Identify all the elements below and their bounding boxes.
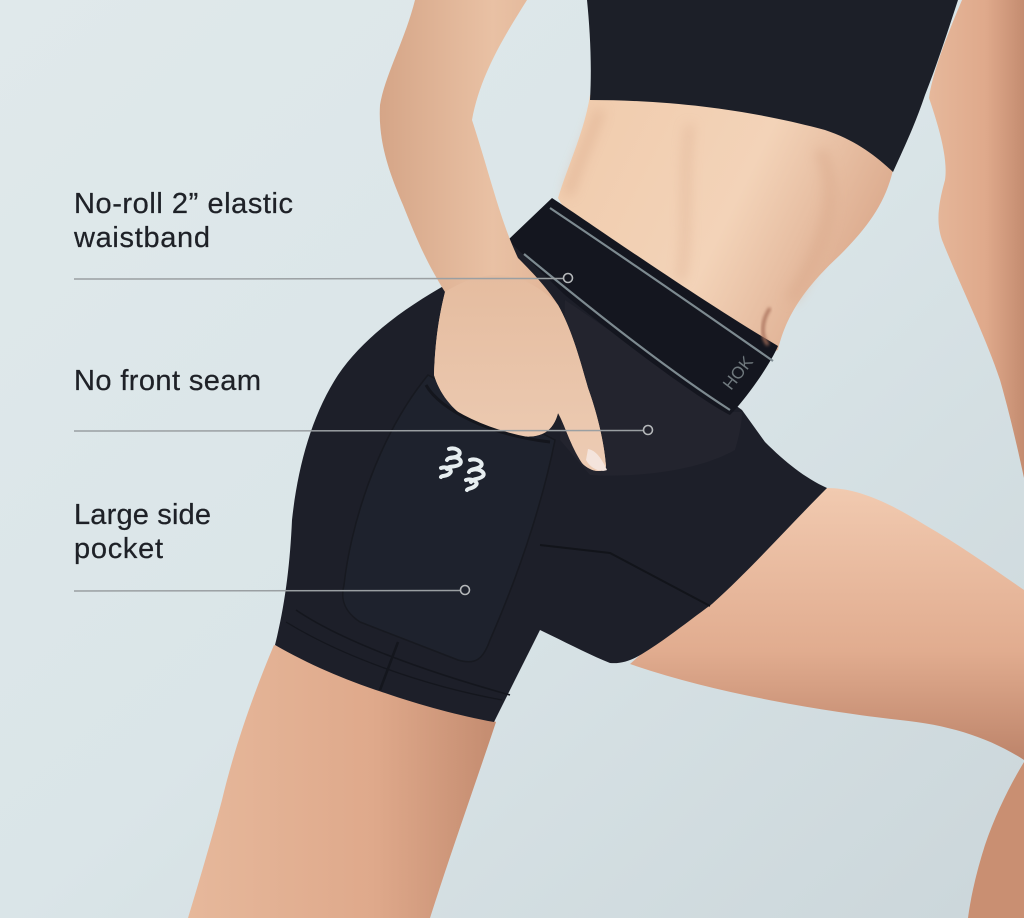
callout label: waistband: waistband xyxy=(73,222,210,254)
callout: front seam xyxy=(74,365,652,434)
callout: side pocket xyxy=(74,499,470,594)
lower right leg xyxy=(968,762,1024,918)
callout label: front seam: No front seam xyxy=(74,365,261,397)
callout label: side pocket xyxy=(74,499,211,565)
side pocket xyxy=(286,375,710,700)
crop top xyxy=(587,0,958,172)
shorts front panel xyxy=(560,300,742,476)
callout: waistband xyxy=(73,188,572,282)
hand highlight xyxy=(434,275,606,471)
right arm xyxy=(929,0,1024,478)
callout label: side pocket: pocket xyxy=(74,533,163,565)
callout label: side pocket: Large side xyxy=(74,499,211,531)
callout line: side pocket xyxy=(74,586,470,594)
waistband logo: HOK xyxy=(719,352,757,393)
torso muscle shading xyxy=(568,110,830,300)
callout line: waistband xyxy=(74,274,572,282)
fingernail xyxy=(586,449,607,471)
left leg xyxy=(188,645,496,918)
navel shadow xyxy=(763,308,770,345)
torso xyxy=(558,90,893,360)
callout label: waistband xyxy=(73,188,293,254)
waistband xyxy=(508,198,778,415)
pocket logo xyxy=(441,448,484,490)
callout line: front seam xyxy=(74,426,652,434)
shorts body xyxy=(275,240,827,722)
left arm and hand xyxy=(380,0,606,471)
pocket opening xyxy=(426,385,550,442)
callout label: waistband: No-roll 2” elastic xyxy=(74,188,293,220)
right thigh xyxy=(630,488,1024,760)
